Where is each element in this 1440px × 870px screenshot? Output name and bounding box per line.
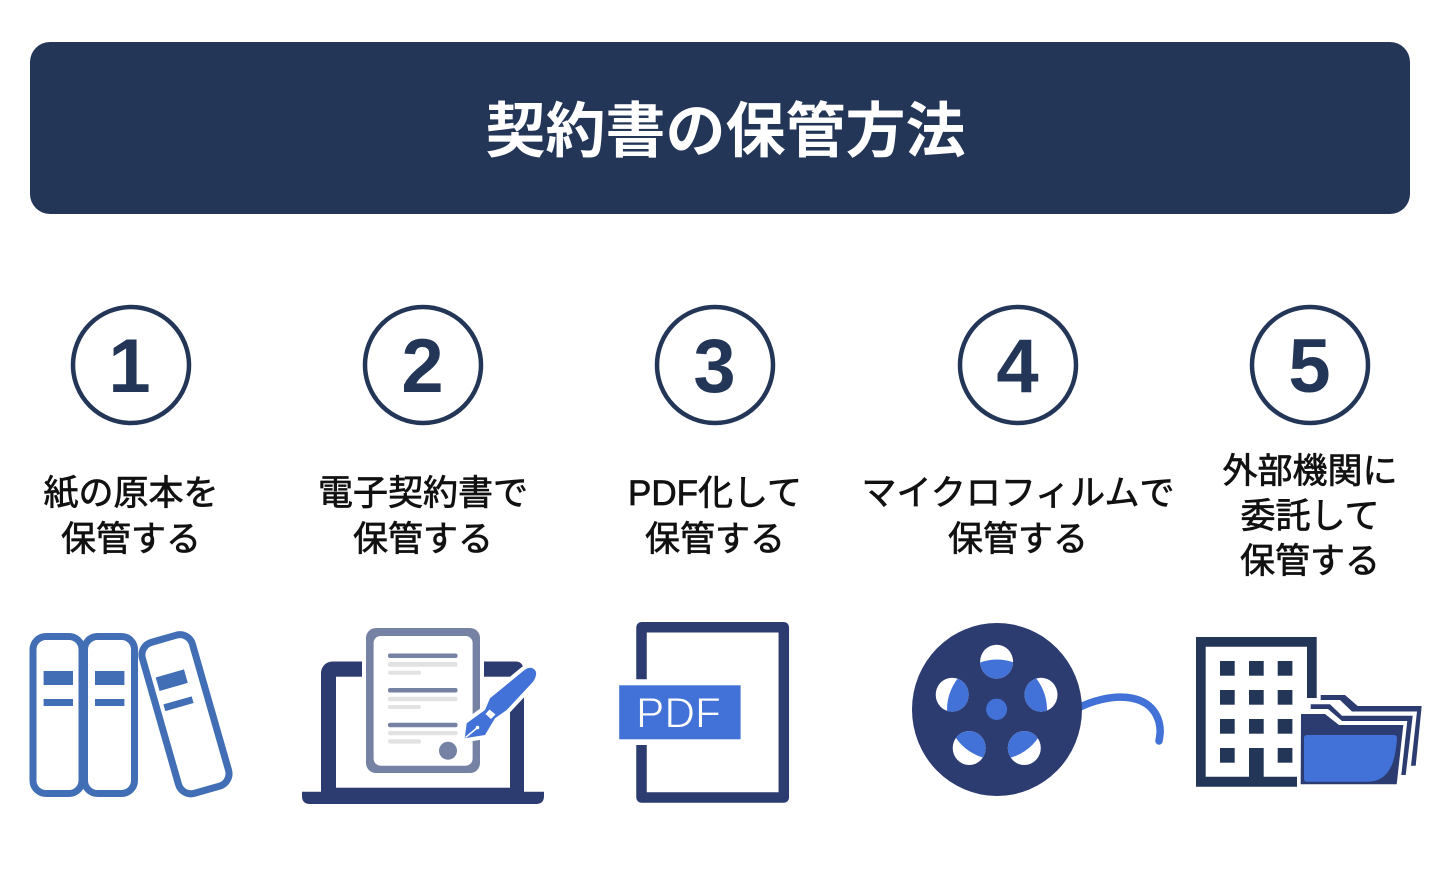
icon: binders — [33, 632, 232, 797]
icon: fountain pen — [465, 668, 536, 738]
title banner — [30, 42, 1410, 214]
method 4: label — [862, 474, 1174, 559]
method 2: number badge: 2 — [401, 324, 444, 409]
icon: stacked folders — [1301, 695, 1422, 784]
method 5: label: 委託して — [1241, 497, 1379, 536]
method 1: label: 保管する — [61, 520, 201, 559]
method 3: label: 保管する — [645, 520, 785, 559]
method 5: label: 保管する — [1240, 542, 1380, 581]
method 1: label — [43, 474, 219, 559]
icon: film reel — [912, 623, 1160, 796]
icon: PDF document: PDF — [636, 690, 721, 738]
method 4: label: 保管する — [948, 520, 1088, 559]
method 1: number badge — [73, 307, 189, 423]
method 5: number badge — [1252, 307, 1368, 423]
method 5: label — [1222, 452, 1398, 581]
method 2: label: 保管する — [353, 520, 493, 559]
method 4: number badge: 4 — [996, 324, 1039, 409]
method 1: number badge: 1 — [108, 324, 151, 409]
method 3: label: PDF化して — [628, 474, 802, 513]
method 4: number badge — [960, 307, 1076, 423]
method 2: label — [318, 474, 528, 559]
icon: office building with folders — [1196, 637, 1422, 790]
icon: laptop with contract and pen — [302, 624, 544, 804]
method 3: number badge: 3 — [693, 324, 736, 409]
method 2: label: 電子契約書で — [318, 474, 528, 513]
title: 契約書の保管方法 — [486, 98, 966, 165]
method 5: label: 外部機関に — [1222, 452, 1398, 491]
method 3: label — [628, 474, 802, 559]
method 2: number badge — [365, 307, 481, 423]
method 5: number badge: 5 — [1288, 324, 1331, 409]
method 4: label: マイクロフィルムで — [862, 474, 1174, 513]
icon: PDF document — [619, 627, 784, 798]
method 3: number badge — [657, 307, 773, 423]
method 1: label: 紙の原本を — [43, 474, 219, 513]
